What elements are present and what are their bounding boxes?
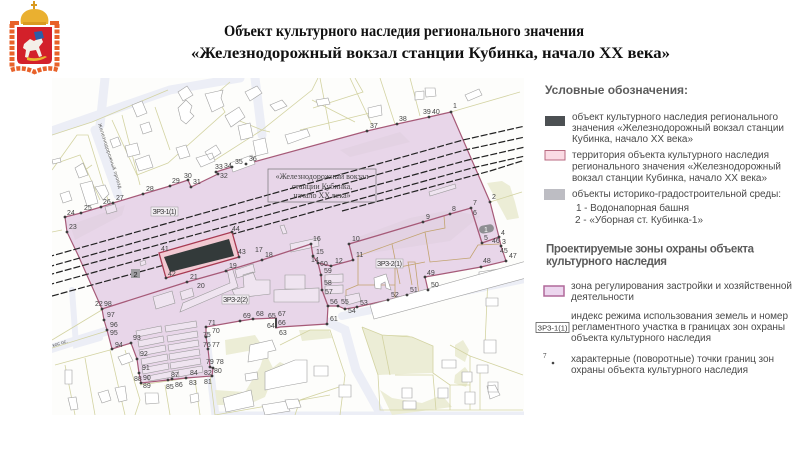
boundary point numbers: 97 bbox=[107, 312, 115, 319]
boundary point numbers: 64 bbox=[267, 323, 275, 330]
boundary point numbers: 11 bbox=[356, 252, 363, 259]
boundary point numbers: 43 bbox=[238, 249, 246, 256]
boundary point numbers: 59 bbox=[324, 268, 332, 275]
legend item: boundary points: охраны объекта культурного наследия bbox=[571, 364, 748, 376]
station name label bbox=[268, 169, 376, 202]
boundary point numbers: 39 bbox=[423, 109, 431, 116]
boundary point numbers: 20 bbox=[197, 283, 205, 290]
boundary point numbers: 76 bbox=[203, 342, 211, 349]
boundary point numbers: 89 bbox=[143, 383, 151, 390]
boundary point numbers: 31 bbox=[193, 179, 201, 186]
boundary point numbers: 7 bbox=[473, 200, 477, 207]
boundary point numbers: 78 bbox=[216, 359, 224, 366]
boundary point numbers: 27 bbox=[116, 195, 124, 202]
street labels: кос ос. bbox=[52, 339, 68, 349]
legend item: heritage territory: регионального значения «Железнодорожный bbox=[572, 162, 781, 172]
boundary point numbers: 30 bbox=[184, 173, 192, 180]
boundary point numbers: 57 bbox=[325, 289, 333, 296]
legend item: historic environment objects: 2 - «Уборная ст. Кубинка-1» bbox=[575, 214, 703, 226]
boundary point numbers: 68 bbox=[256, 311, 264, 318]
station territory and building bbox=[159, 232, 239, 278]
legend item: heritage territory: вокзал станции Кубинка, начало XX века» bbox=[572, 172, 767, 184]
boundary point numbers: 91 bbox=[142, 365, 150, 372]
legend item: cultural heritage object: объект культурного наследия регионального bbox=[572, 111, 778, 123]
legend item: land-use index: ЗРЗ-1(1) bbox=[538, 324, 568, 332]
street labels bbox=[52, 122, 124, 349]
boundary point numbers: 61 bbox=[330, 316, 338, 323]
legend item: land-use index bbox=[536, 311, 788, 344]
boundary point numbers: 4 bbox=[501, 230, 505, 237]
historic objects bbox=[131, 224, 495, 279]
legend item: land-use index: объекта культурного наследия bbox=[571, 332, 711, 344]
boundary point numbers: 38 bbox=[399, 116, 407, 123]
boundary point numbers: 29 bbox=[172, 178, 180, 185]
zone index labels bbox=[151, 207, 403, 304]
green areas bbox=[215, 181, 519, 415]
boundary point numbers: 49 bbox=[427, 270, 435, 277]
title: Объект культурного наследия регионального значения bbox=[224, 23, 584, 40]
boundary point numbers: 15 bbox=[316, 249, 324, 256]
boundary point numbers: 14 bbox=[311, 257, 319, 264]
station name label: станции Кубинка, bbox=[292, 182, 352, 191]
legend item: boundary points: характерные (поворотные) точки границ зон bbox=[571, 354, 774, 365]
boundary point numbers: 40 bbox=[432, 109, 440, 116]
buildings inside the zone bbox=[105, 184, 519, 312]
boundary point numbers: 66 bbox=[278, 320, 286, 327]
map: site plan of the station area bbox=[52, 78, 524, 415]
boundary point numbers: 48 bbox=[483, 258, 491, 265]
boundary point numbers: 83 bbox=[189, 380, 197, 387]
boundary point numbers: 26 bbox=[103, 199, 111, 206]
title: «Железнодорожный вокзал станции Кубинка, начало XX века» bbox=[191, 45, 670, 62]
boundary point numbers: 70 bbox=[212, 328, 220, 335]
boundary point numbers: 52 bbox=[391, 292, 399, 299]
legend item: heritage territory: территория объекта культурного наследия bbox=[572, 149, 769, 161]
boundary point numbers: 35 bbox=[235, 159, 243, 166]
boundary point numbers: 8 bbox=[452, 206, 456, 213]
legend item: cultural heritage object: значения «Железнодорожный вокзал станции bbox=[572, 123, 784, 134]
boundary point numbers: 47 bbox=[509, 253, 517, 260]
boundary point numbers: 42 bbox=[168, 271, 176, 278]
boundary point numbers: 58 bbox=[324, 280, 332, 287]
boundary point numbers: 77 bbox=[212, 342, 220, 349]
boundary point numbers: 36 bbox=[249, 156, 257, 163]
legend item: heritage territory bbox=[545, 149, 781, 184]
land parcel outlines bbox=[52, 78, 523, 415]
legend heading: protection zones: Проектируемые зоны охраны объекта bbox=[546, 244, 755, 256]
buildings outside the zone bbox=[52, 86, 552, 415]
legend item: historic environment objects bbox=[544, 188, 781, 226]
historic objects: 1 bbox=[484, 227, 488, 234]
boundary point numbers: 82 bbox=[204, 370, 212, 377]
railway tracks bbox=[30, 126, 525, 296]
boundary point numbers: 90 bbox=[143, 375, 151, 382]
boundary point numbers: 93 bbox=[133, 335, 141, 342]
boundary point numbers: 63 bbox=[279, 330, 287, 337]
boundary point numbers: 54 bbox=[348, 308, 356, 315]
boundary point numbers: 2 bbox=[492, 194, 496, 201]
boundary point numbers: 1 bbox=[453, 103, 457, 110]
boundary point numbers: 60 bbox=[320, 261, 328, 268]
internal zone boundaries bbox=[102, 208, 499, 328]
boundary point numbers: 79 bbox=[206, 359, 214, 366]
boundary point numbers: 69 bbox=[243, 313, 251, 320]
boundary point numbers: 25 bbox=[84, 205, 92, 212]
boundary point numbers: 87 bbox=[171, 372, 179, 379]
parking rows bbox=[136, 321, 203, 381]
boundary point numbers: 84 bbox=[190, 370, 198, 377]
boundary point numbers: 28 bbox=[146, 186, 154, 193]
legend item: land-use index: регламентного участка в границах зон охраны bbox=[572, 322, 785, 333]
legend item: historic environment objects: 1 - Водонапорная башня bbox=[576, 202, 689, 214]
boundary point numbers: 46 bbox=[492, 238, 500, 245]
boundary point numbers: 16 bbox=[313, 236, 321, 243]
boundary point numbers: 67 bbox=[278, 311, 286, 318]
boundary point numbers: 85 bbox=[166, 384, 174, 391]
legend item: cultural heritage object: Кубинка, начало XX века» bbox=[572, 133, 693, 145]
boundary point numbers: 96 bbox=[110, 322, 118, 329]
pink protection zone bbox=[65, 112, 506, 383]
boundary point numbers: 6 bbox=[473, 210, 477, 217]
boundary point numbers: 22 bbox=[95, 301, 103, 308]
boundary point numbers: 5 bbox=[484, 235, 488, 242]
boundary point numbers: 21 bbox=[190, 274, 198, 281]
station name label: начало XX века» bbox=[293, 191, 351, 200]
boundary point numbers: 23 bbox=[69, 224, 77, 231]
parcel lines inside the zone bbox=[346, 216, 500, 300]
boundary point numbers: 34 bbox=[224, 163, 232, 170]
zone index labels: ЗРЗ-1(1) bbox=[152, 209, 176, 216]
boundary point numbers: 55 bbox=[341, 299, 349, 306]
boundary point numbers: 32 bbox=[220, 173, 228, 180]
boundary point numbers: 80 bbox=[214, 368, 222, 375]
boundary point numbers: 41 bbox=[161, 246, 169, 253]
boundary point numbers: 53 bbox=[360, 300, 368, 307]
boundary point numbers: 3 bbox=[502, 239, 506, 246]
boundary point numbers: 45 bbox=[500, 248, 508, 255]
legend item: historic environment objects: объекты историко-градостроительной среды: bbox=[572, 188, 781, 200]
boundary point numbers: 18 bbox=[265, 252, 273, 259]
legend heading: protection zones bbox=[546, 244, 755, 268]
boundary point numbers: 9 bbox=[426, 214, 430, 221]
streets bbox=[40, 78, 530, 420]
boundary point numbers: 24 bbox=[67, 210, 75, 217]
boundary point numbers: 81 bbox=[204, 379, 212, 386]
legend item: boundary points: 7 bbox=[543, 352, 547, 360]
legend heading: Условные обозначения: bbox=[545, 83, 688, 97]
boundary point numbers: 86 bbox=[175, 382, 183, 389]
boundary point numbers: 98 bbox=[104, 301, 112, 308]
boundary point numbers: 75 bbox=[203, 332, 211, 339]
boundary point numbers bbox=[67, 103, 517, 391]
emblem: Moscow Oblast coat of arms bbox=[10, 1, 59, 72]
boundary point numbers: 94 bbox=[115, 342, 123, 349]
legend item: land-use index: индекс режима использования земель и номер bbox=[571, 311, 788, 322]
boundary point numbers: 92 bbox=[140, 351, 148, 358]
boundary point numbers: 51 bbox=[410, 287, 418, 294]
legend item: cultural heritage object bbox=[545, 111, 784, 145]
boundary point numbers: 44 bbox=[232, 226, 240, 233]
boundary point numbers: 17 bbox=[255, 247, 263, 254]
boundary point numbers: 37 bbox=[370, 123, 378, 130]
street labels: Железнодорожный проезд bbox=[96, 122, 124, 189]
boundary point numbers: 71 bbox=[208, 320, 216, 327]
station name label: «Железнодорожный вокзал bbox=[276, 172, 368, 181]
boundary point numbers: 33 bbox=[215, 164, 223, 171]
boundary point numbers: 65 bbox=[268, 313, 276, 320]
boundary point numbers: 56 bbox=[330, 299, 338, 306]
boundary point numbers: 88 bbox=[134, 376, 142, 383]
zone index labels: ЗРЗ-2(2) bbox=[223, 297, 248, 304]
boundary points bbox=[64, 111, 507, 384]
legend item: boundary points bbox=[543, 352, 774, 376]
legend item: regulation zone: деятельности bbox=[571, 292, 634, 303]
historic objects: 2 bbox=[133, 270, 138, 279]
legend heading: protection zones: культурного наследия bbox=[546, 256, 667, 268]
boundary point numbers: 50 bbox=[431, 282, 439, 289]
zone index labels: ЗРЗ-2(1) bbox=[377, 261, 402, 268]
boundary point numbers: 95 bbox=[110, 330, 118, 337]
boundary point numbers: 19 bbox=[229, 263, 237, 270]
legend item: regulation zone bbox=[544, 281, 792, 303]
title bbox=[191, 23, 670, 62]
boundary point numbers: 10 bbox=[352, 236, 360, 243]
boundary point numbers: 12 bbox=[335, 258, 343, 265]
legend item: regulation zone: зона регулирования застройки и хозяйственной bbox=[571, 281, 792, 292]
